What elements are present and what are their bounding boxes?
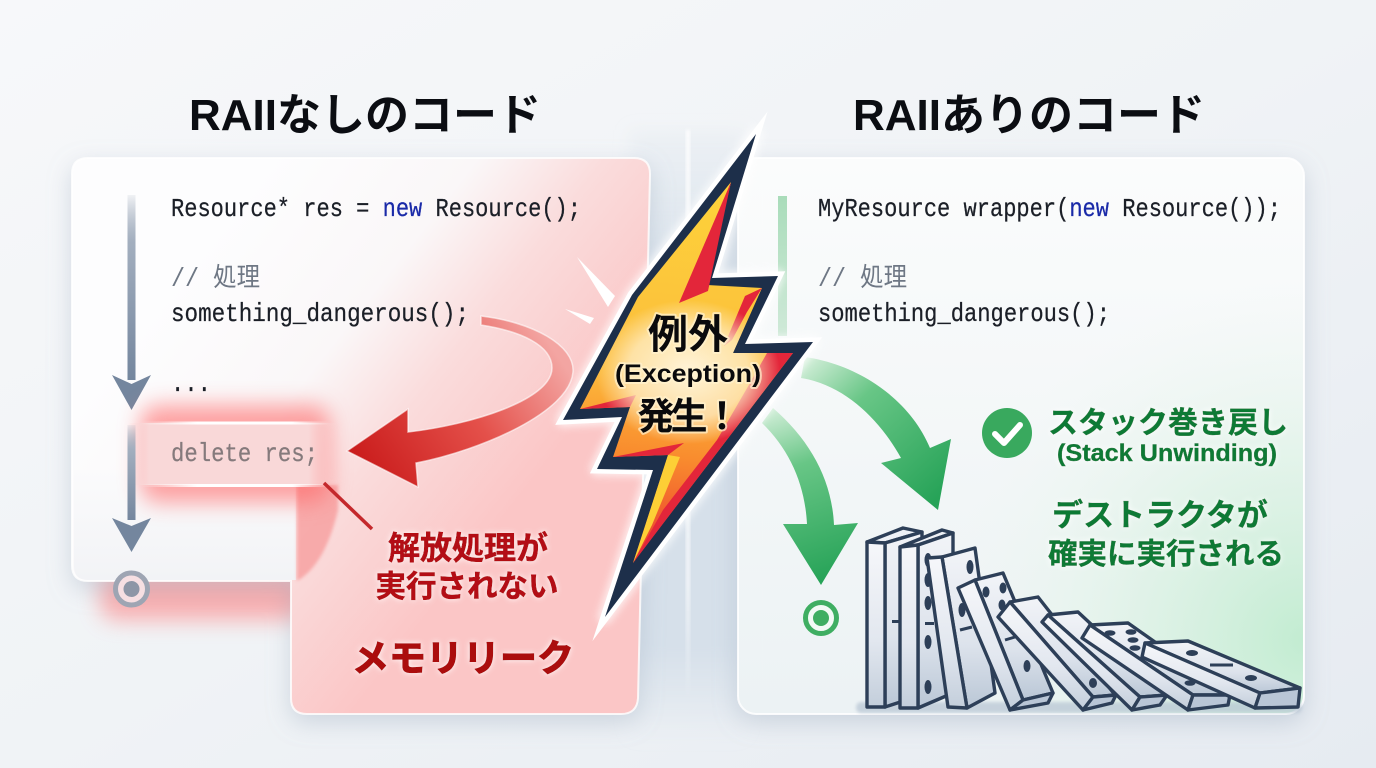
domino 3 — [927, 548, 995, 708]
code text — [818, 194, 1281, 329]
bolt outline — [563, 134, 813, 617]
end marker — [806, 602, 836, 634]
domino 4 — [958, 573, 1053, 710]
pink wedge beside pocket — [297, 485, 338, 581]
code text — [171, 194, 581, 469]
domino 6 — [1042, 612, 1167, 710]
code text: delete res; — [171, 439, 318, 469]
panel: code with RAII — [738, 158, 1304, 714]
connector line — [324, 483, 372, 529]
bolt red strips — [580, 182, 793, 563]
bolt text: 発生！ — [638, 396, 736, 437]
bolt fill — [580, 182, 793, 563]
flow arrow 2 — [112, 425, 151, 552]
label: stack unwinding: スタック巻き戻し — [1048, 407, 1288, 440]
panel body — [738, 158, 1304, 714]
domino 5 — [998, 597, 1116, 710]
label: release not executed: 解放処理が — [388, 530, 548, 566]
code text: // 処理 — [171, 263, 260, 294]
label: stack unwinding — [1048, 407, 1288, 467]
green corner tint — [739, 159, 1303, 713]
label: stack unwinding: (Stack Unwinding) — [1057, 440, 1277, 467]
heading: without RAII: RAIIなしのコード — [189, 91, 541, 140]
end marker — [116, 573, 148, 605]
bolt text: (Exception) — [615, 360, 761, 388]
label: destructor runs: デストラクタが — [1052, 498, 1268, 533]
code text: MyResource wrapper(new Resource()); — [818, 194, 1281, 224]
code text: something_dangerous(); — [171, 299, 469, 329]
code text: ... — [171, 369, 211, 399]
bolt centre glow — [596, 300, 780, 444]
bolt yellow sliver — [633, 455, 680, 563]
green arrow to dominoes — [801, 357, 951, 510]
panel: code without RAII — [72, 158, 650, 714]
code text: // 処理 — [818, 263, 907, 294]
code text: something_dangerous(); — [818, 299, 1110, 329]
ground under dominoes — [856, 702, 1302, 713]
success flow bar — [778, 196, 787, 336]
heading: with RAII: RAIIありのコード — [853, 91, 1205, 140]
domino 7 — [1082, 623, 1230, 710]
white lower-left pocket — [74, 470, 296, 580]
icon: check — [982, 408, 1032, 458]
domino 8 — [1142, 641, 1300, 708]
bolt text: 例外 — [648, 313, 728, 357]
domino 2 — [900, 530, 953, 708]
bolt soft halo — [563, 134, 813, 617]
green arrow to end marker — [762, 408, 858, 585]
label: destructor runs — [1048, 498, 1284, 571]
sparks — [565, 257, 615, 324]
label: release not executed: 実行されない — [376, 570, 558, 604]
dominoes — [867, 528, 1300, 710]
central light streak — [686, 130, 690, 700]
domino 1 — [867, 528, 922, 707]
red glow under pocket — [100, 570, 310, 620]
red arrow jump — [347, 316, 573, 487]
icon: lightning bolt — [563, 134, 813, 617]
code text: Resource* res = new Resource(); — [171, 194, 581, 224]
bolt text — [615, 313, 761, 437]
label: destructor runs: 確実に実行される — [1048, 538, 1284, 571]
label: memory leak: メモリリーク — [352, 638, 574, 679]
panel body — [72, 158, 650, 714]
flow arrow 1 — [112, 195, 151, 410]
delete highlight — [128, 405, 340, 503]
label: release not executed — [376, 530, 558, 604]
central gap between panels — [630, 130, 745, 740]
